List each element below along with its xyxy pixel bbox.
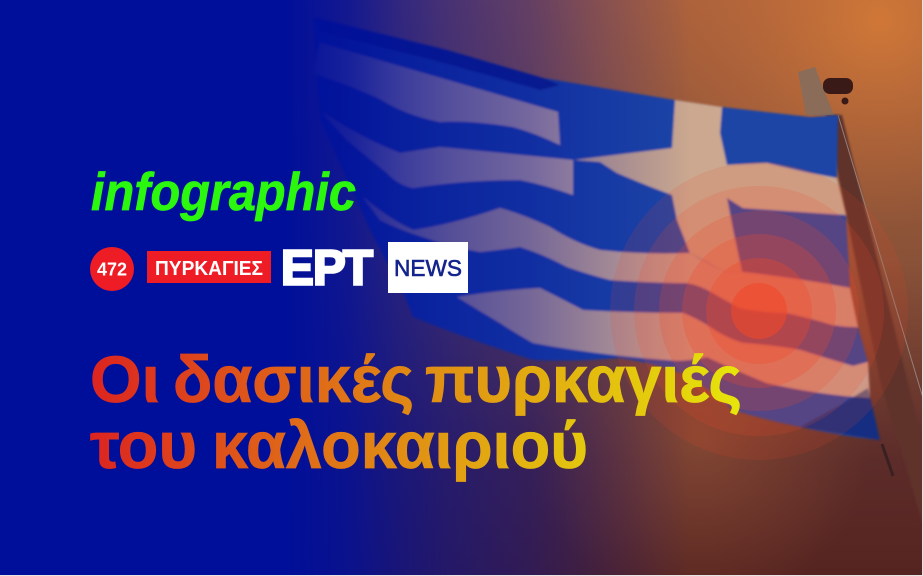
title: main headline: δασικές [173, 342, 414, 416]
logo: NEWS box [388, 242, 468, 293]
flag white stripe 1 [313, 43, 560, 145]
title: main headline [90, 342, 742, 482]
flag white stripe 2 [323, 113, 573, 195]
solid blue left panel [0, 0, 286, 576]
flag blue cloth [313, 17, 880, 440]
greek flag [313, 17, 880, 440]
label: ΠΥΡΚΑΓΙΕΣ [147, 251, 271, 283]
flag white cross [574, 100, 846, 272]
flag dark fold along top edge [313, 17, 560, 90]
pulse rings marker [610, 162, 908, 460]
title: main headline: του [90, 408, 197, 482]
flag white stripe 4 [457, 288, 870, 398]
label: ΠΥΡΚΑΓΙΕΣ: ΠΥΡΚΑΓΙΕΣ [155, 258, 263, 280]
title: main headline: καλοκαιριού [212, 408, 588, 482]
flagpole with pulley and rope [798, 67, 923, 525]
title: main headline: Οι [90, 342, 160, 416]
flag shadow at lower tip [800, 388, 880, 440]
badge: issue number 472: 472 [97, 260, 127, 280]
logo: ΕΡΤ: ΕΡΤ [281, 242, 373, 296]
heading: infographic: infographic [91, 163, 356, 222]
badge: issue number 472 [90, 247, 134, 291]
logo: NEWS box: NEWS [394, 255, 462, 281]
title: main headline: πυρκαγιές [425, 342, 742, 416]
flag white stripe 3 [363, 197, 858, 327]
